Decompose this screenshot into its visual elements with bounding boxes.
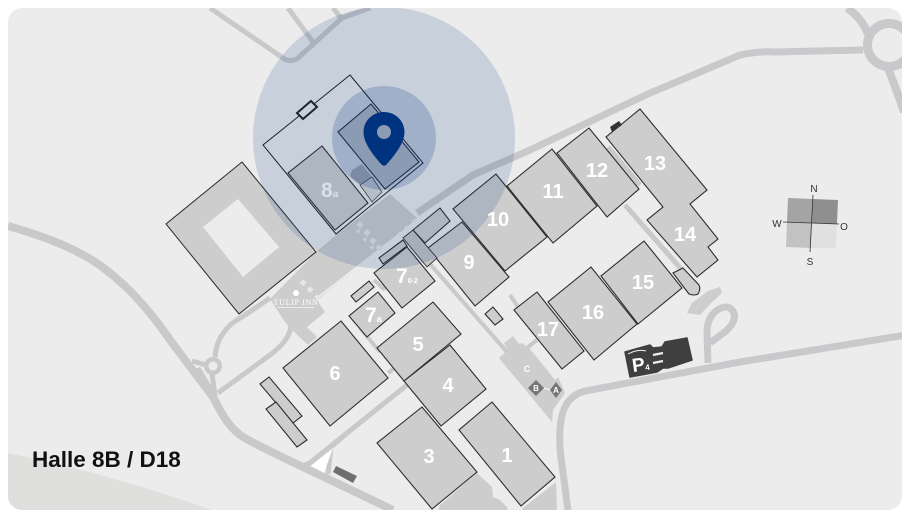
bottom-left terrain [8, 453, 212, 510]
hall numbers: 1 [501, 445, 513, 467]
hall numbers: 70-2 [396, 265, 418, 288]
hall 16 [548, 267, 637, 360]
hall 11 [507, 149, 597, 243]
hall numbers: 5 [412, 334, 424, 356]
hall 8a label: 8a [321, 179, 339, 202]
square courtyard building [166, 162, 316, 314]
location pin [364, 112, 404, 166]
hall numbers: 10 [487, 209, 509, 231]
hall label: Halle 8B / D18 [32, 447, 181, 472]
hall numbers: 15 [632, 272, 654, 294]
compass: S [807, 257, 814, 268]
hall 15 [601, 241, 682, 324]
hall numbers: 16 [582, 302, 604, 324]
hall numbers: 12 [586, 160, 608, 182]
hall numbers: 6 [329, 363, 341, 385]
hall numbers: 3 [423, 446, 435, 468]
parking P4 sign [625, 338, 692, 377]
second narrow building [266, 402, 307, 447]
white triangle [311, 448, 333, 473]
hall numbers: 11 [542, 181, 564, 203]
hall 8a [288, 146, 368, 230]
hall 10 [453, 174, 547, 271]
hall 17 [514, 292, 584, 369]
hall 1 [459, 402, 555, 506]
small building north of hall 9 [413, 208, 450, 243]
compass: W [772, 219, 782, 230]
plaza and hotel forecourt [270, 194, 417, 345]
hall 7a [349, 292, 395, 337]
entrance building C with A and B: B [533, 384, 539, 393]
compass: N [810, 184, 818, 195]
building south of hall 1 [521, 482, 557, 512]
dark gate rectangle [333, 466, 357, 483]
hall 5 [377, 302, 461, 381]
hall numbers: 9 [463, 252, 475, 274]
location radius inner [332, 86, 436, 190]
narrow building west of hall 6 [260, 377, 302, 423]
hall 6 [283, 321, 388, 426]
hall 12 [557, 128, 639, 217]
small square kiosk [485, 307, 503, 325]
hall 7 [374, 247, 435, 308]
plaza paths [300, 218, 417, 300]
hall 9 [428, 222, 509, 306]
hall numbers: 17 [537, 319, 559, 341]
hall 3 [377, 407, 477, 509]
compass [772, 184, 848, 268]
hall numbers [329, 153, 697, 468]
black marker near hall 13 [610, 121, 622, 132]
halls 13 and 14 [606, 109, 718, 277]
parking P4 sign: P4 [631, 354, 651, 377]
small building above hall 7 [379, 240, 407, 264]
hall numbers: 14 [674, 224, 697, 246]
square building outline [166, 162, 316, 314]
hall 4 [404, 345, 486, 426]
location radius outer [253, 7, 515, 269]
capsule annex [673, 268, 700, 295]
hall numbers: 4 [442, 375, 454, 397]
hotel logo [274, 290, 318, 308]
connector building [403, 230, 437, 267]
hotel logo: TULIP INN [274, 298, 318, 307]
hall 8 grounds [263, 75, 423, 234]
building south of hall 3 [438, 473, 508, 512]
small rectangular building [351, 281, 374, 302]
compass: O [840, 222, 848, 233]
entrance building C with A and B [499, 336, 565, 422]
hall numbers: 7a [365, 304, 383, 327]
hall numbers: 13 [644, 153, 666, 175]
entrance building C with A and B: A [553, 386, 559, 395]
entrance building C with A and B: C [524, 364, 531, 374]
hall 8b highlighted [338, 104, 419, 202]
